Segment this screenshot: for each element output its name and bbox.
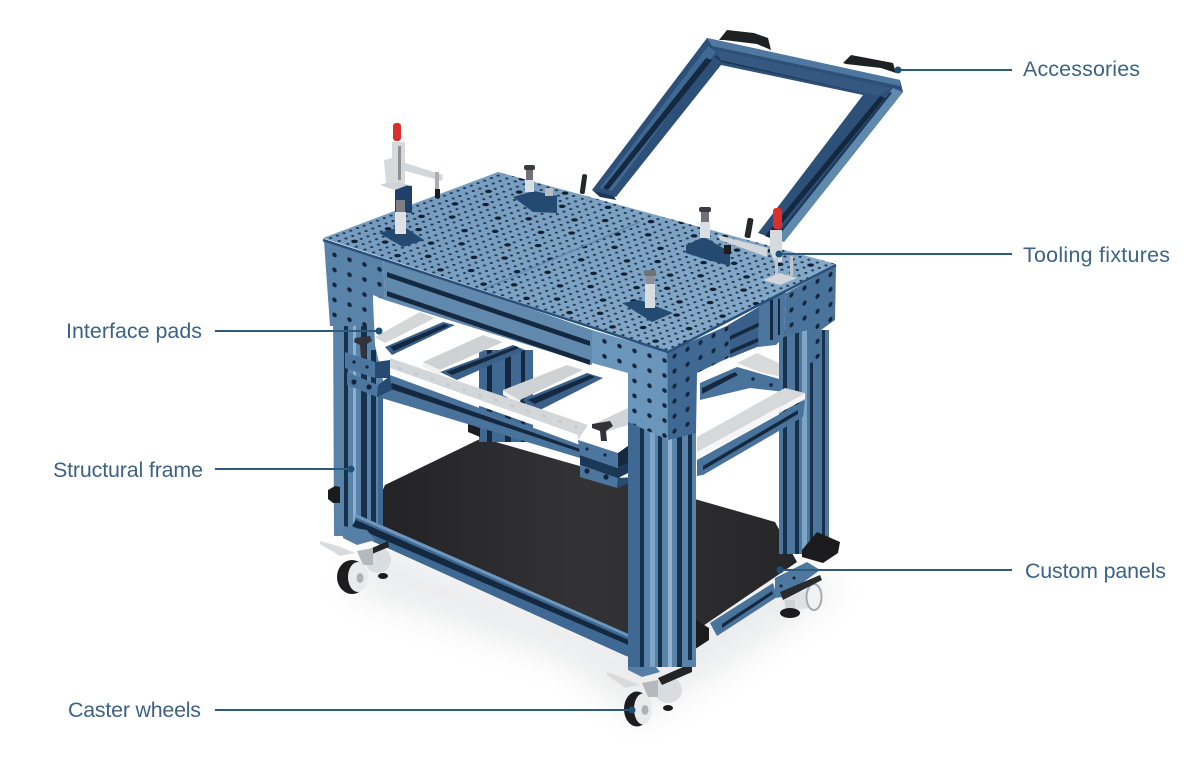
right clamp blocks <box>578 421 635 488</box>
callout: caster wheels: Caster wheels <box>68 698 201 722</box>
long side rails under the table <box>383 258 592 365</box>
tooling fixture: front plunger <box>622 270 673 322</box>
panel: accessories frame <box>592 30 903 242</box>
callout: tooling fixtures: Tooling fixtures <box>1023 243 1170 267</box>
icon: handle right <box>843 55 896 73</box>
gusset plates <box>324 241 836 440</box>
icon: caster wheel right <box>780 575 822 618</box>
callout: accessories: Accessories <box>1023 57 1140 81</box>
front lower rail <box>352 514 642 660</box>
panel: table top <box>323 172 836 352</box>
back legs <box>468 350 533 442</box>
right lower rail <box>710 562 820 636</box>
structural frame: front leg <box>628 410 696 667</box>
white right bar <box>697 388 805 452</box>
tooling fixture: right plunger and clamp <box>686 207 797 285</box>
tooling fixture: rear plunger <box>513 165 557 213</box>
callout: structural frame: Structural frame <box>53 458 203 482</box>
icon: handle left <box>719 30 771 50</box>
structural frame: long middle rail <box>378 375 580 458</box>
black pins behind the table <box>580 174 754 238</box>
structural frame: left leg <box>333 300 383 536</box>
interface pads: long white bar <box>390 358 588 441</box>
clamp bracket <box>758 282 786 347</box>
callout: tooling fixtures <box>776 243 1170 267</box>
callout: structural frame <box>53 458 354 482</box>
black foot blocks <box>328 486 840 655</box>
plunger and base <box>379 226 424 247</box>
icon: caster wheel front <box>607 658 692 726</box>
callout: custom panels <box>776 559 1166 583</box>
callout: interface pads <box>66 319 382 343</box>
callout: caster wheels <box>68 698 636 722</box>
floor shadow <box>345 540 840 720</box>
tooling fixture: left toggle clamp <box>379 123 443 247</box>
interface pads: cross rails and pads <box>375 312 805 476</box>
short side rails under the table <box>728 305 762 358</box>
structural frame: right leg <box>779 330 829 554</box>
left clamp blocks <box>345 336 392 397</box>
callout: interface pads: Interface pads <box>66 319 202 343</box>
right lower rail <box>697 400 805 476</box>
callout: custom panels: Custom panels <box>1025 559 1166 583</box>
icon: caster wheel left <box>320 526 391 594</box>
callout: accessories <box>894 57 1140 81</box>
panel: custom bottom panel <box>368 438 797 640</box>
right upper pad and rails <box>700 353 790 400</box>
